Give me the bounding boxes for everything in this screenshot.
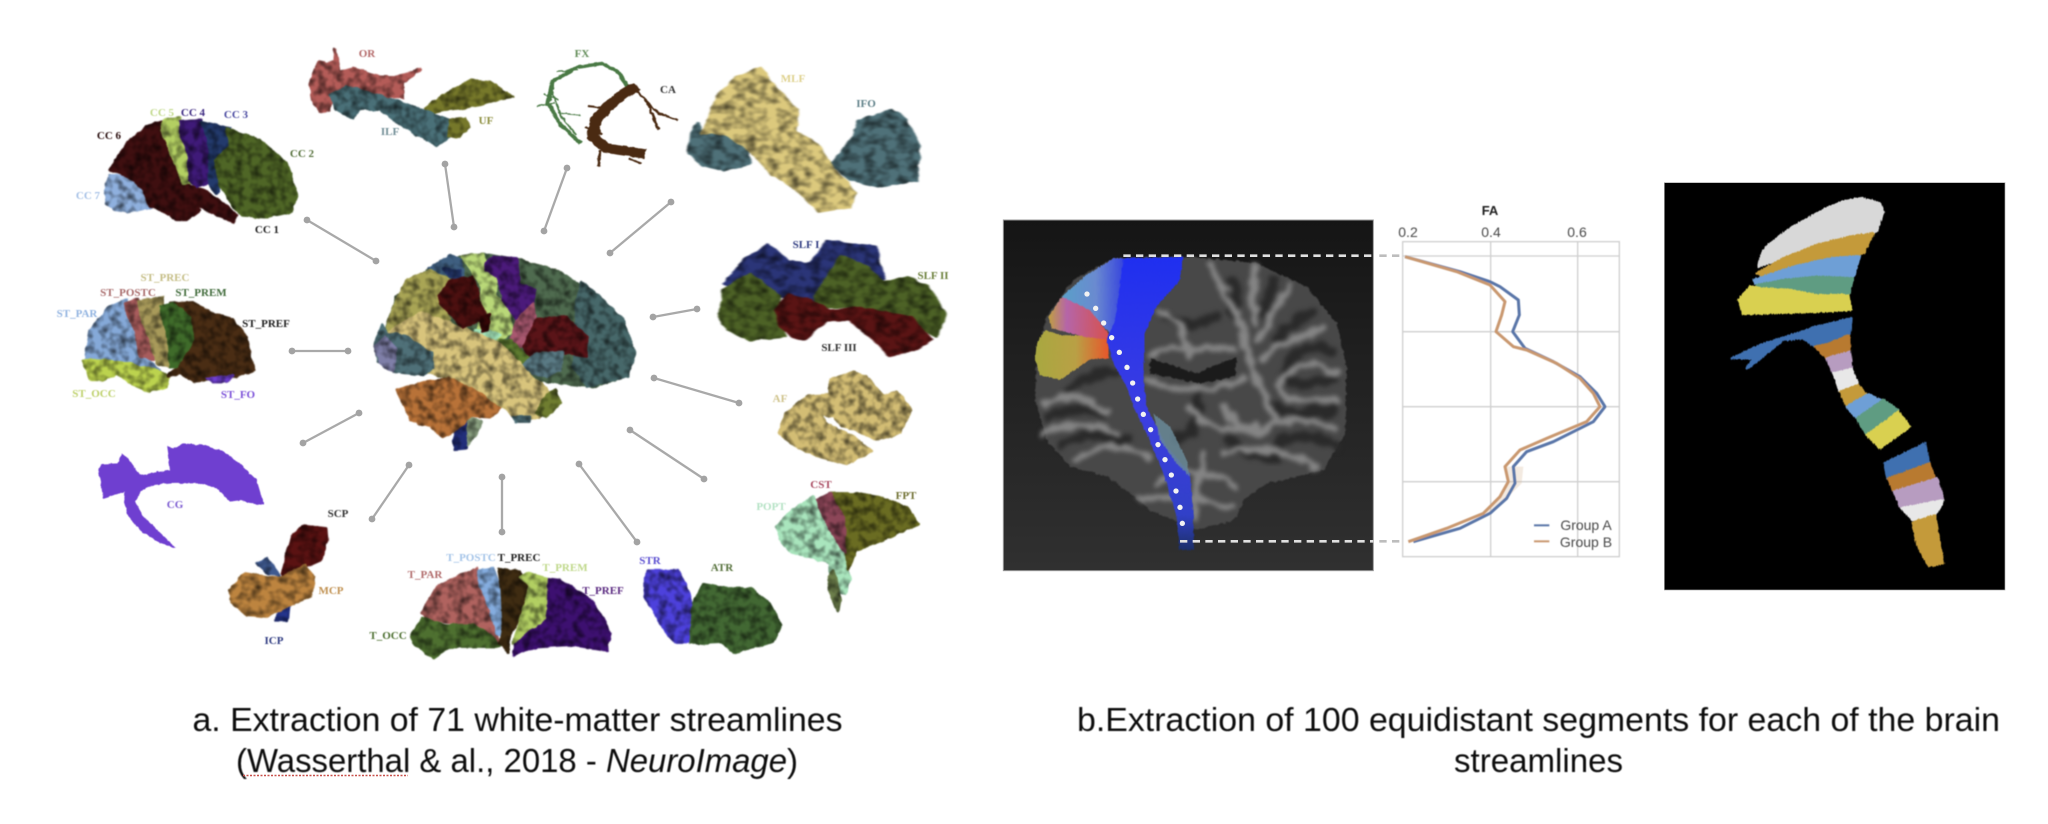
spell-check underline [243, 774, 408, 776]
labels: ST: ST_FO [221, 389, 256, 401]
label: AF: AF [773, 393, 788, 405]
brain: CC segments [105, 117, 297, 222]
caption b: streamlines [1454, 742, 1623, 779]
labels: STR ATR: ATR [711, 562, 734, 574]
labels: OR ILF UF [359, 48, 494, 138]
legend swatch: group B [1534, 538, 1549, 544]
panel: FX CA [537, 48, 678, 167]
labels: STR ATR: STR [639, 555, 662, 567]
panel: CST POPT FPT [756, 479, 918, 612]
labels: ST: ST_OCC [72, 388, 116, 400]
label: CG: CG [167, 499, 184, 511]
labels: CC: CC 2 [290, 148, 315, 160]
labels: ST: ST_PREC [141, 272, 190, 284]
brain: cerebellar peduncles [230, 526, 327, 620]
brain: ST segments [83, 297, 253, 392]
panel: SLF [719, 239, 949, 355]
panel a: connector lines [289, 161, 742, 545]
labels: CC: CC 1 [255, 224, 279, 236]
labels: CC: CC 7 [76, 190, 101, 202]
brain: MLF IFO tracts [689, 68, 919, 212]
group B shading [1483, 467, 1523, 513]
panel: striato bundle (ST) [57, 272, 290, 401]
labels: CST POPT FPT: FPT [896, 490, 917, 502]
black background [1664, 183, 2005, 590]
labels: CC: CC 5 [150, 107, 175, 119]
labels: SLF: SLF II [917, 270, 949, 282]
labels: CST POPT FPT: POPT [756, 501, 786, 513]
panel: central whole-brain render [375, 253, 635, 449]
labels: SCP MCP ICP [265, 508, 349, 647]
dashed guides to chart [1123, 256, 1400, 541]
brain: SLF segments [719, 240, 945, 355]
legend swatch: group A [1534, 522, 1549, 528]
labels: MLF IFO: IFO [856, 98, 876, 110]
labels: MLF IFO: MLF [781, 73, 805, 85]
panel: STR ATR [639, 555, 782, 653]
labels: CC [76, 107, 315, 236]
chart axis labels and legend text: Group B [1560, 534, 1612, 550]
labels: T: T_PAR [408, 569, 443, 581]
labels: T: T_OCC [369, 630, 407, 642]
chart grid [1403, 242, 1619, 557]
labels: T [369, 552, 624, 642]
group B line [1405, 257, 1600, 542]
caption a [192, 701, 842, 779]
labels: ST [57, 272, 290, 401]
brain: STR ATR tracts [645, 570, 782, 653]
panel b: segmented streamline on black [1664, 183, 2005, 590]
streamline fan [1035, 257, 1194, 550]
segment dots [1084, 291, 1185, 526]
chart axis labels and legend text [1398, 203, 1612, 550]
labels: SLF: SLF I [793, 239, 819, 251]
labels: T: T_PREC [498, 552, 540, 564]
labels: CST POPT FPT [756, 479, 917, 513]
chart axis labels and legend text: Group A [1560, 517, 1612, 533]
panel: MLF IFO [689, 68, 919, 212]
labels: FX CA: FX [575, 48, 589, 60]
labels: STR ATR [639, 555, 734, 574]
panel: CG [98, 443, 264, 548]
labels: OR ILF UF: UF [479, 115, 494, 127]
group A line [1405, 257, 1605, 542]
labels: CC: CC 6 [97, 130, 122, 142]
panel: corpus callosum bundle [76, 107, 315, 236]
chart axis labels and legend text: 0.6 [1567, 224, 1587, 240]
labels: SCP MCP ICP: MCP [318, 585, 344, 597]
labels: OR ILF UF: OR [359, 48, 376, 60]
brain: T segments [411, 568, 610, 658]
labels: ST: ST_PREF [242, 318, 290, 330]
labels: SCP MCP ICP: ICP [265, 635, 284, 647]
labels: FX CA: CA [660, 84, 676, 96]
labels: T: T_POSTC [446, 552, 496, 564]
chart axis labels and legend text: 0.4 [1481, 224, 1501, 240]
brain: OR ILF UF tracts [310, 48, 513, 146]
labels: CC: CC 4 [181, 107, 206, 119]
MRI background [1003, 220, 1373, 571]
labels: SLF: SLF III [821, 342, 857, 354]
labels: FX CA [575, 48, 676, 96]
lower tract stripes [1732, 318, 1943, 566]
caption b: b.Extraction of 100 equidistant segments for each of the brain [1077, 701, 2000, 738]
labels: ST: ST_PAR [57, 308, 98, 320]
panel b: coronal MRI with streamline [1003, 220, 1400, 571]
labels: ST: ST_PREM [175, 287, 227, 299]
upper fan stripes [1738, 198, 1883, 314]
chart axis labels and legend text: FA [1482, 203, 1499, 218]
panel: SCP MCP ICP [230, 508, 349, 647]
caption a: (Wasserthal & al., 2018 - NeuroImage) [236, 742, 798, 779]
brain: arcuate fasciculus [778, 372, 912, 464]
labels: OR ILF UF: ILF [381, 126, 399, 138]
brain: CST POPT FPT tracts [777, 493, 918, 612]
panel: OR ILF UF [310, 48, 513, 146]
tracts: fornix and cingulum arc [537, 63, 678, 167]
labels: SLF [793, 239, 949, 354]
caption a: a. Extraction of 71 white-matter streamlines [192, 701, 842, 738]
brain: cingulum [98, 443, 264, 548]
labels: SCP MCP ICP: SCP [328, 508, 349, 520]
FA profile chart [1403, 242, 1619, 557]
labels: ST: ST_POSTC [100, 287, 156, 299]
panel: AF [773, 372, 912, 464]
labels: T: T_PREF [582, 585, 624, 597]
labels: T: T_PREM [542, 562, 588, 574]
panel: T bundle [369, 552, 624, 658]
caption b [1077, 701, 2000, 779]
brain slice [1035, 257, 1347, 530]
labels: MLF IFO [781, 73, 876, 110]
chart axis labels and legend text: 0.2 [1398, 224, 1418, 240]
labels: CC: CC 3 [224, 109, 249, 121]
labels: CST POPT FPT: CST [810, 479, 832, 491]
